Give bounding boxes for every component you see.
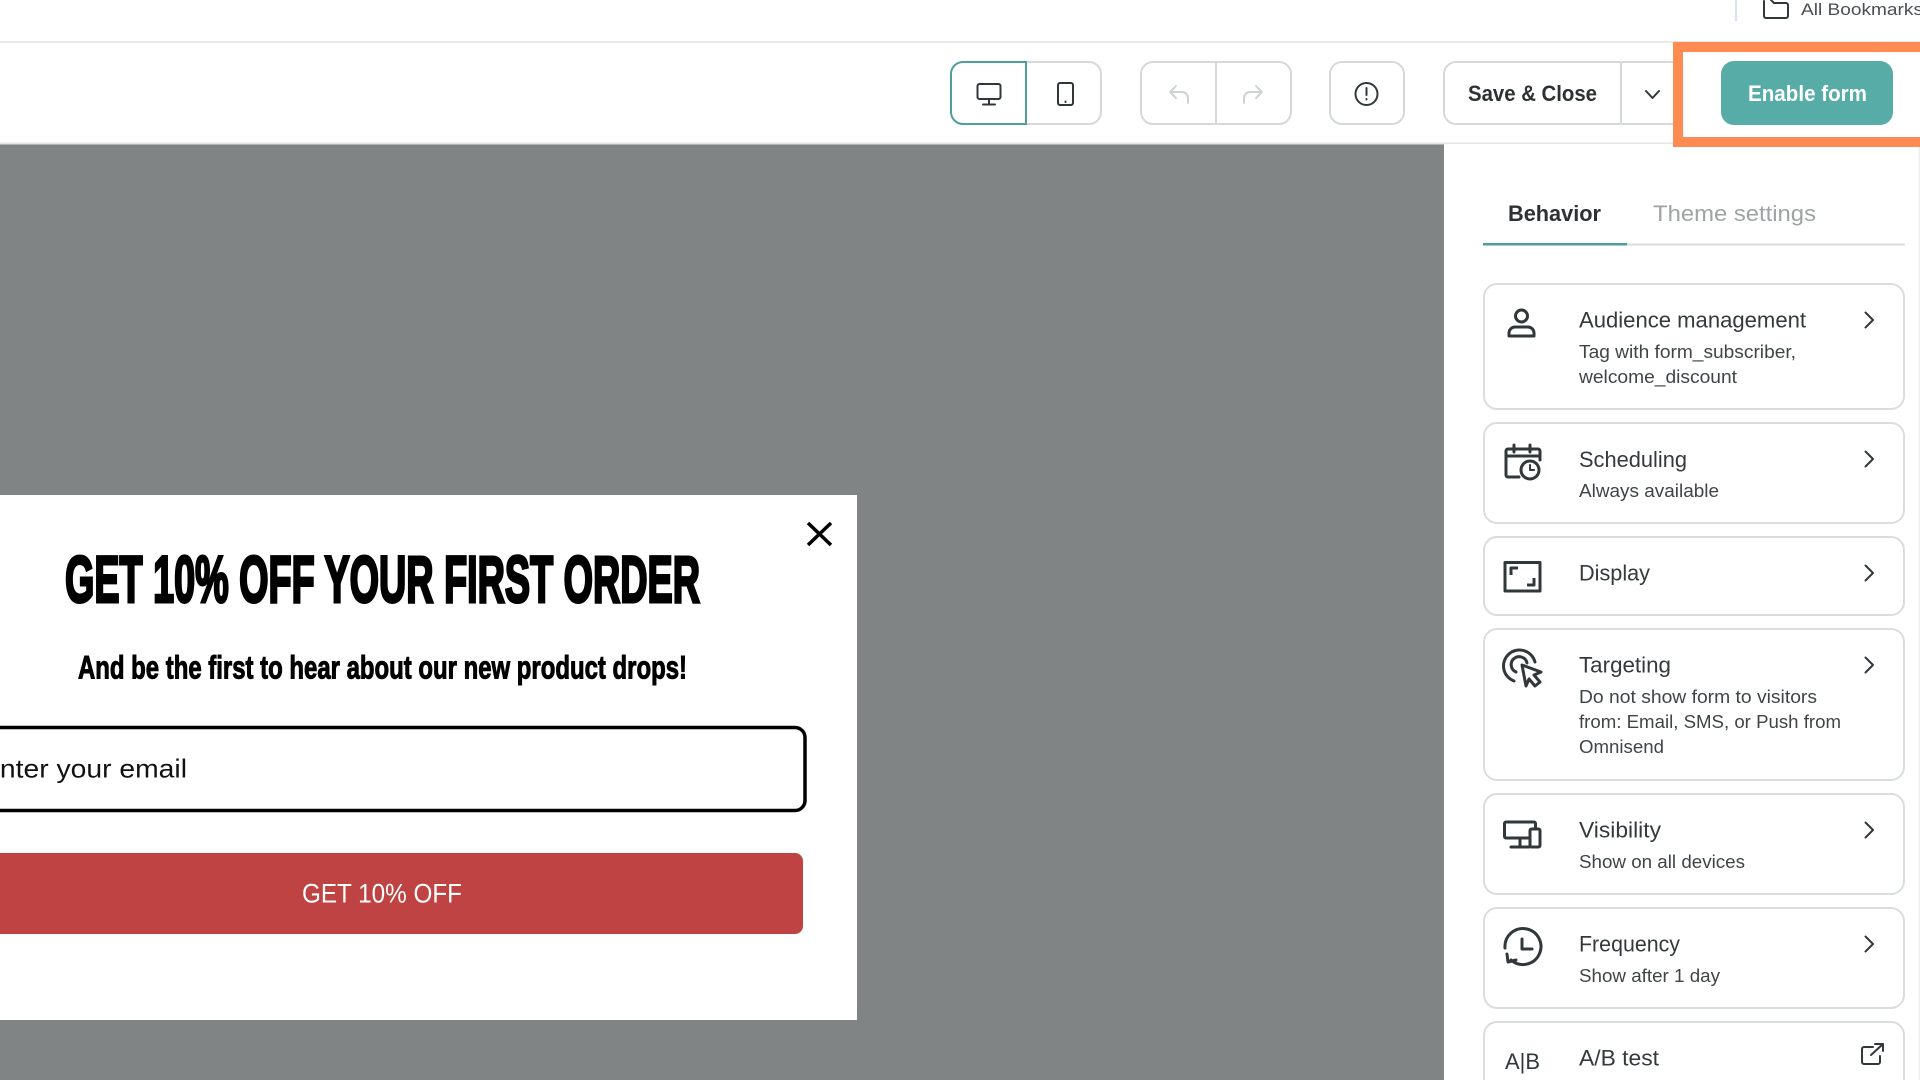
save and close button: Save & Close (1468, 81, 1597, 106)
bookmarks label: All Bookmarks (1801, 0, 1920, 19)
icon: display frame (1505, 562, 1540, 591)
card: audience management: welcome_discount (1578, 366, 1737, 388)
card: audience management (1484, 284, 1904, 409)
save and close button (1444, 62, 1681, 124)
close icon (808, 523, 831, 545)
card: scheduling: Always available (1579, 480, 1719, 501)
submit button (0, 853, 803, 934)
popup subheading: And be the first to hear about our new product drops! (78, 650, 687, 686)
icon: redo (1244, 86, 1262, 103)
icon: calendar clock (1506, 445, 1540, 479)
preview canvas (0, 144, 1444, 1080)
info button (1330, 62, 1404, 124)
settings sidebar (1444, 144, 1920, 1080)
browser bookmarks bar (0, 0, 1920, 43)
desktop and mobile toggle (951, 62, 1101, 124)
card: display (1484, 537, 1904, 615)
card: frequency: Frequency (1579, 932, 1680, 956)
tabs: Behavior (1508, 201, 1601, 226)
icon: undo (1170, 86, 1188, 103)
icon: mobile (1058, 83, 1073, 105)
icon: a|b: A|B (1505, 1049, 1540, 1074)
card: audience management: Audience management (1579, 308, 1806, 332)
popup heading: GET 10% OFF YOUR FIRST ORDER (65, 542, 700, 616)
icon: target cursor (1504, 650, 1541, 686)
card: a/b test (1484, 1022, 1904, 1080)
tabs: Theme settings (1653, 201, 1816, 226)
popup form preview (0, 495, 857, 1020)
card: frequency: Show after 1 day (1579, 965, 1721, 986)
card: targeting: from: Email, SMS, or Push from (1579, 711, 1841, 732)
toolbar (951, 47, 1920, 142)
highlight box around enable button (1678, 47, 1920, 142)
card: targeting: Do not show form to visitors (1579, 686, 1817, 707)
card: scheduling: Scheduling (1579, 447, 1687, 472)
card: targeting (1484, 629, 1904, 780)
card: a/b test: A/B test (1579, 1046, 1659, 1070)
undo and redo buttons (1141, 62, 1291, 124)
card: targeting: Omnisend (1579, 736, 1664, 757)
icon: devices (1504, 822, 1540, 847)
icon: history clock (1505, 929, 1541, 965)
card: scheduling (1484, 423, 1904, 523)
submit button: GET 10% OFF (302, 878, 462, 908)
card: targeting: Targeting (1579, 652, 1671, 678)
card: frequency (1484, 908, 1904, 1008)
card: audience management: Tag with form_subscriber, (1579, 341, 1796, 363)
card: visibility (1484, 794, 1904, 894)
icon: person (1509, 310, 1534, 336)
email input (0, 728, 805, 810)
icon: external link (1862, 1044, 1883, 1064)
tabs (1483, 201, 1905, 246)
card: display: Display (1579, 560, 1650, 586)
enable form button (1721, 61, 1893, 125)
enable form button: Enable form (1748, 81, 1867, 106)
card: visibility: Visibility (1579, 818, 1661, 842)
icon: desktop (978, 84, 1000, 104)
icon: bookmarks folder (1764, 0, 1788, 18)
card: visibility: Show on all devices (1579, 851, 1745, 872)
